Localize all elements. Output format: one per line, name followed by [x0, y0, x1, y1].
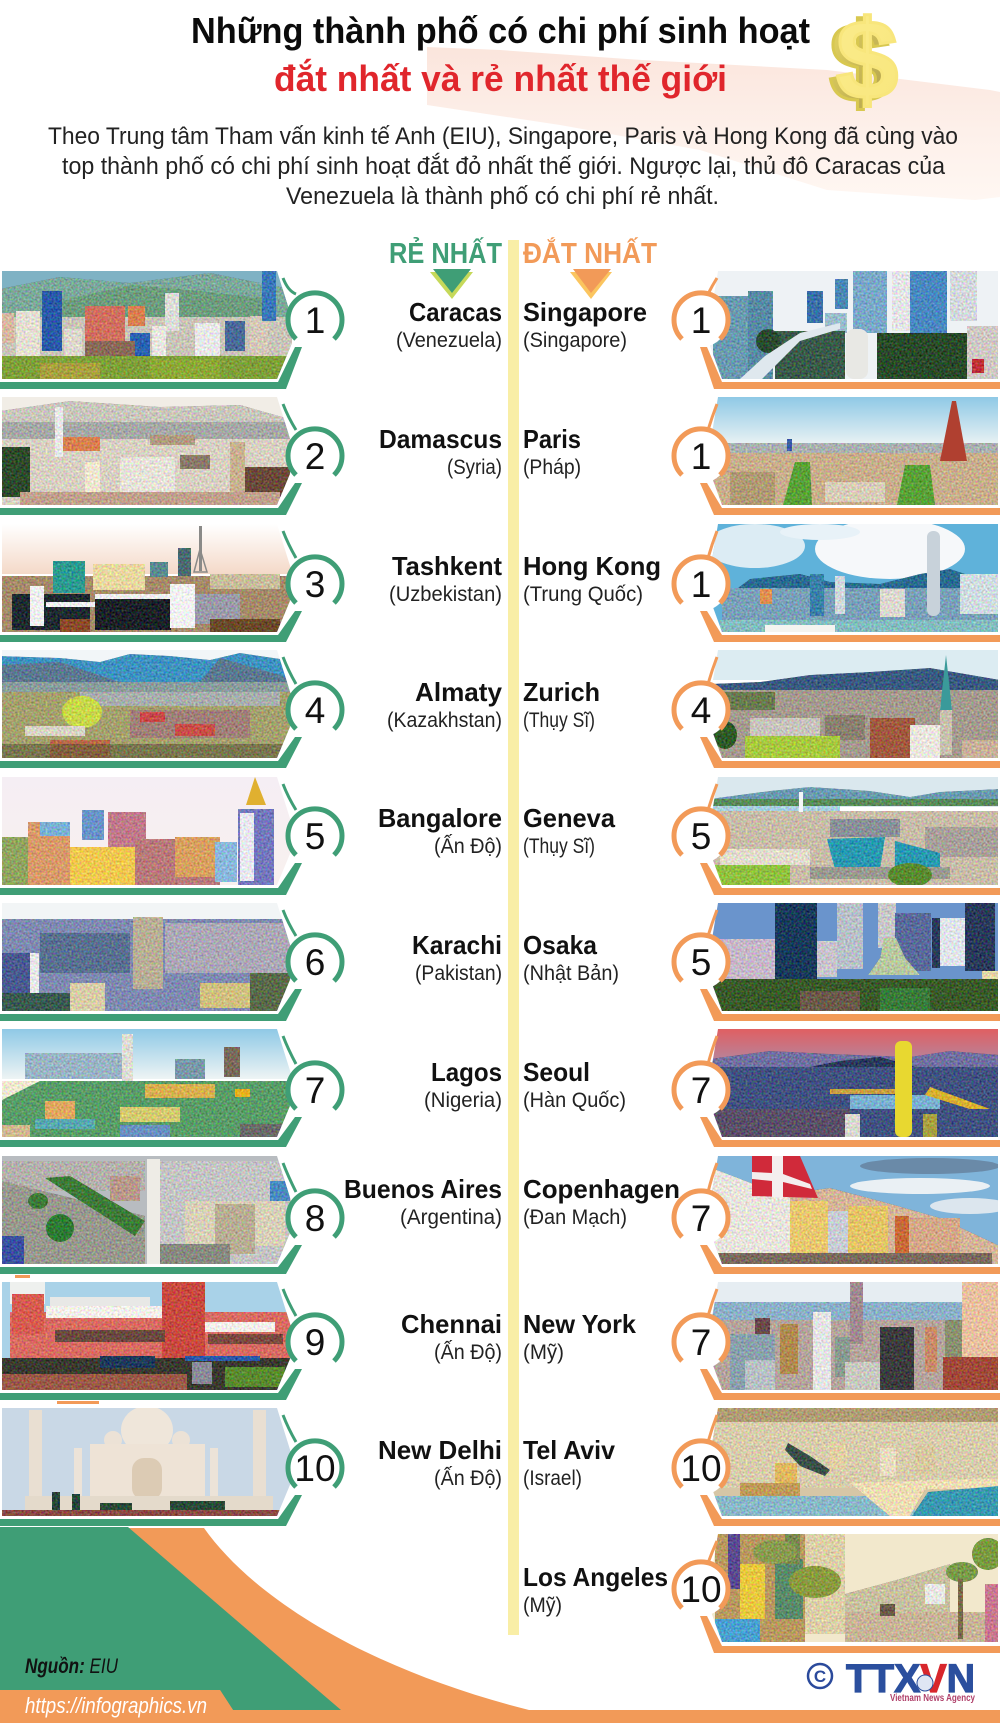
city label [396, 297, 502, 352]
city label: Buenos Aires [344, 1174, 502, 1204]
footer decoration: orange and green curved shapes [0, 1275, 1000, 1723]
photo: Paris [700, 397, 1000, 505]
rank badge [288, 683, 342, 737]
city label: (Pakistan) [415, 962, 502, 985]
city label: (Ấn Độ) [434, 1341, 502, 1364]
row: Tel Aviv rank 10 [523, 1408, 1000, 1526]
photo: New Delhi [0, 1406, 300, 1516]
city label: Paris [523, 424, 581, 454]
city label [523, 1435, 616, 1490]
ribbon [0, 1495, 302, 1526]
city label: Singapore [523, 297, 647, 327]
ribbon [0, 989, 302, 1021]
rank badge: 6 [305, 942, 325, 983]
city label [523, 1174, 680, 1229]
row: Osaka rank 5 [523, 903, 1000, 1021]
photo: New York [700, 1282, 1000, 1390]
city label: (Thụy Sĩ) [523, 835, 595, 858]
row: Tashkent rank 3 [0, 524, 502, 642]
rank badge: 1 [691, 564, 711, 605]
photo: Osaka [700, 903, 1000, 1011]
city label: (Hàn Quốc) [523, 1089, 626, 1112]
photo: Geneva [700, 777, 1000, 887]
city label [401, 1309, 502, 1364]
city label: Los Angeles [523, 1562, 668, 1592]
rank badge: 10 [680, 1569, 722, 1610]
ribbon [0, 483, 302, 515]
city label [389, 551, 502, 606]
row: Paris rank 1 [523, 397, 1000, 515]
rank badge: 7 [305, 1070, 325, 1111]
row: Singapore rank 1 [523, 271, 1000, 389]
ribbon [0, 1369, 302, 1400]
rank badge [674, 683, 728, 737]
photo: Buenos Aires [0, 1156, 300, 1264]
row: Damascus rank 2 [0, 397, 502, 515]
rank badge [288, 1315, 342, 1369]
photo: Bangalore [0, 777, 300, 885]
city label: Damascus [379, 424, 502, 454]
rank badge [288, 1441, 342, 1495]
photo: Singapore [700, 271, 1000, 379]
row: Chennai rank 9 [0, 1282, 502, 1400]
ribbon [700, 1245, 1000, 1274]
background brush stroke [427, 47, 1000, 200]
ribbon [700, 611, 1000, 642]
city label [412, 930, 502, 985]
city label [523, 424, 581, 479]
city label: (Singapore) [523, 329, 627, 352]
photo: Caracas [0, 271, 300, 379]
ribbon [0, 347, 302, 389]
city label: Osaka [523, 930, 597, 960]
city label [523, 930, 619, 985]
city label: Karachi [412, 930, 502, 960]
city label: Caracas [409, 297, 502, 327]
city label: Bangalore [378, 803, 502, 833]
rank badge [674, 429, 728, 483]
ribbon [0, 1117, 302, 1147]
photo: Tel Aviv [700, 1408, 1000, 1516]
city label: Chennai [401, 1309, 502, 1339]
photo: Hong Kong [700, 519, 1000, 632]
row: Buenos Aires rank 8 [0, 1156, 502, 1274]
city label: (Ấn Độ) [434, 835, 502, 858]
city label [523, 677, 600, 732]
icon: dollar sign: $ [836, 0, 898, 122]
city label: Copenhagen [523, 1174, 680, 1204]
rank badge [288, 1063, 342, 1117]
ribbon [700, 737, 1000, 768]
photo: Tashkent [0, 524, 300, 632]
city label [523, 803, 616, 858]
city label [378, 1435, 502, 1490]
photo: Karachi [0, 903, 300, 1011]
rank badge: 5 [691, 942, 711, 983]
rank badge [288, 429, 342, 483]
row: Geneva rank 5 [523, 777, 1000, 895]
rank badge [288, 935, 342, 989]
ribbon [700, 1369, 1000, 1400]
rank badge [288, 293, 342, 347]
city label [523, 297, 647, 352]
photo: Chennai [0, 1282, 300, 1390]
rank badge: 7 [691, 1198, 711, 1239]
photo: Copenhagen [700, 1156, 1000, 1264]
row: Copenhagen rank 7 [523, 1156, 1000, 1274]
row: Almaty rank 4 [0, 650, 503, 768]
ribbon [700, 347, 1000, 389]
city label: (Ấn Độ) [434, 1467, 502, 1490]
centre divider bar [508, 240, 519, 1635]
ribbon [700, 989, 1000, 1021]
title [191, 10, 810, 99]
source note: Nguồn: EIU [25, 1655, 119, 1678]
rank badge [674, 1191, 728, 1245]
rank badge: 4 [691, 690, 711, 731]
city label [378, 803, 502, 858]
row: New York rank 7 [523, 1282, 1000, 1400]
city label: (Venezuela) [396, 329, 502, 352]
ribbon [0, 611, 302, 642]
rank badge [674, 557, 728, 611]
row: Lagos rank 7 [0, 1029, 502, 1147]
city label: Seoul [523, 1057, 590, 1087]
column header: cheapest [389, 236, 502, 299]
rank badge [674, 1315, 728, 1369]
ribbon [700, 483, 1000, 515]
intro text [48, 123, 958, 210]
photo: Lagos [0, 1029, 300, 1137]
rank badge [674, 1063, 728, 1117]
city label [344, 1174, 502, 1229]
icon: dollar sign: $ [829, 0, 891, 125]
rank badge: 1 [691, 436, 711, 477]
intro text: top thành phố có chi phí sinh hoạt đắt đỏ nhất thế giới. Ngược lại, thủ đô Caracas của [62, 153, 946, 180]
city label [523, 1057, 626, 1112]
city label: New York [523, 1309, 637, 1339]
ribbon [0, 863, 302, 895]
city label: (Israel) [523, 1467, 582, 1490]
rank badge: 10 [680, 1448, 722, 1489]
ribbon [700, 1616, 1000, 1653]
rank badge [288, 557, 342, 611]
rank badge: 5 [305, 816, 325, 857]
ribbon [700, 863, 1000, 895]
city label: Tel Aviv [523, 1435, 616, 1465]
title: Những thành phố có chi phí sinh hoạt [191, 10, 810, 51]
column header: cheapest: RẺ NHẤT [389, 236, 502, 270]
ribbon [700, 1117, 1000, 1147]
city label [523, 1562, 668, 1617]
ribbon [700, 1495, 1000, 1526]
city label: Almaty [415, 677, 503, 707]
city label [523, 551, 661, 606]
rank badge [288, 1191, 342, 1245]
rank badge: 4 [305, 690, 325, 731]
city label: Lagos [431, 1057, 502, 1087]
city label [387, 677, 503, 732]
city label: (Nhật Bản) [523, 962, 619, 985]
rank badge: 1 [305, 300, 325, 341]
city label: New Delhi [378, 1435, 502, 1465]
logo: TTXVN: C [814, 1667, 826, 1686]
rank badge: 2 [305, 436, 325, 477]
row: Hong Kong rank 1 [523, 519, 1000, 642]
intro text: Theo Trung tâm Tham vấn kinh tế Anh (EIU), Singapore, Paris và Hong Kong đã cùng vào [48, 123, 958, 150]
photo: Los Angeles [700, 1534, 1000, 1642]
rank badge [674, 293, 728, 347]
logo: TTXVN: Vietnam News Agency [890, 1693, 975, 1704]
city label: (Mỹ) [523, 1341, 564, 1364]
rank badge: 8 [305, 1198, 325, 1239]
row: Seoul rank 7 [523, 1029, 1000, 1147]
photo: Seoul [700, 1029, 1000, 1137]
city label: (Uzbekistan) [389, 583, 502, 606]
rank badge: 7 [691, 1070, 711, 1111]
ribbon [0, 737, 302, 768]
ribbon [0, 1245, 302, 1274]
row: New Delhi rank 10 [0, 1406, 502, 1526]
rank badge: 1 [691, 300, 711, 341]
city label: (Thụy Sĩ) [523, 709, 595, 732]
row: Caracas rank 1 [0, 271, 502, 389]
row: Los Angeles rank 10 [523, 1534, 1000, 1653]
row: Bangalore rank 5 [0, 777, 502, 895]
city label [523, 1309, 637, 1364]
city label: Geneva [523, 803, 616, 833]
rank badge: 9 [305, 1322, 325, 1363]
rank badge [674, 1562, 728, 1616]
logo: TTXVN: TTXVN [846, 1657, 975, 1701]
rank badge: 3 [305, 564, 325, 605]
city label: (Đan Mạch) [523, 1206, 627, 1229]
photo: Damascus [0, 397, 300, 505]
rank badge: 7 [691, 1322, 711, 1363]
city label: (Syria) [447, 456, 502, 479]
city label: Zurich [523, 677, 600, 707]
city label: (Kazakhstan) [387, 709, 502, 732]
website tab: https://infographics.vn [25, 1693, 207, 1718]
website tab [0, 1690, 240, 1723]
title: đắt nhất và rẻ nhất thế giới [274, 57, 727, 99]
city label [379, 424, 502, 479]
rank badge: 5 [691, 816, 711, 857]
city label [424, 1057, 502, 1112]
rank badge [674, 935, 728, 989]
row: Karachi rank 6 [0, 903, 502, 1021]
row: Zurich rank 4 [523, 650, 1000, 768]
rank badge [288, 809, 342, 863]
city label: (Trung Quốc) [523, 583, 643, 606]
city label: Tashkent [392, 551, 502, 581]
city label: (Argentina) [400, 1206, 502, 1229]
intro text: Venezuela là thành phố có chi phí rẻ nhất. [286, 183, 719, 210]
column header: most expensive: ĐẮT NHẤT [523, 236, 657, 270]
rank badge: 10 [294, 1448, 336, 1489]
photo: Zurich [700, 650, 1000, 758]
rank badge [674, 809, 728, 863]
city label: (Mỹ) [523, 1594, 562, 1617]
rank badge [674, 1441, 728, 1495]
city label: Hong Kong [523, 551, 661, 581]
photo: Almaty [0, 650, 300, 758]
column header: most expensive [523, 236, 657, 299]
city label: (Pháp) [523, 456, 581, 479]
city label: (Nigeria) [424, 1089, 502, 1112]
